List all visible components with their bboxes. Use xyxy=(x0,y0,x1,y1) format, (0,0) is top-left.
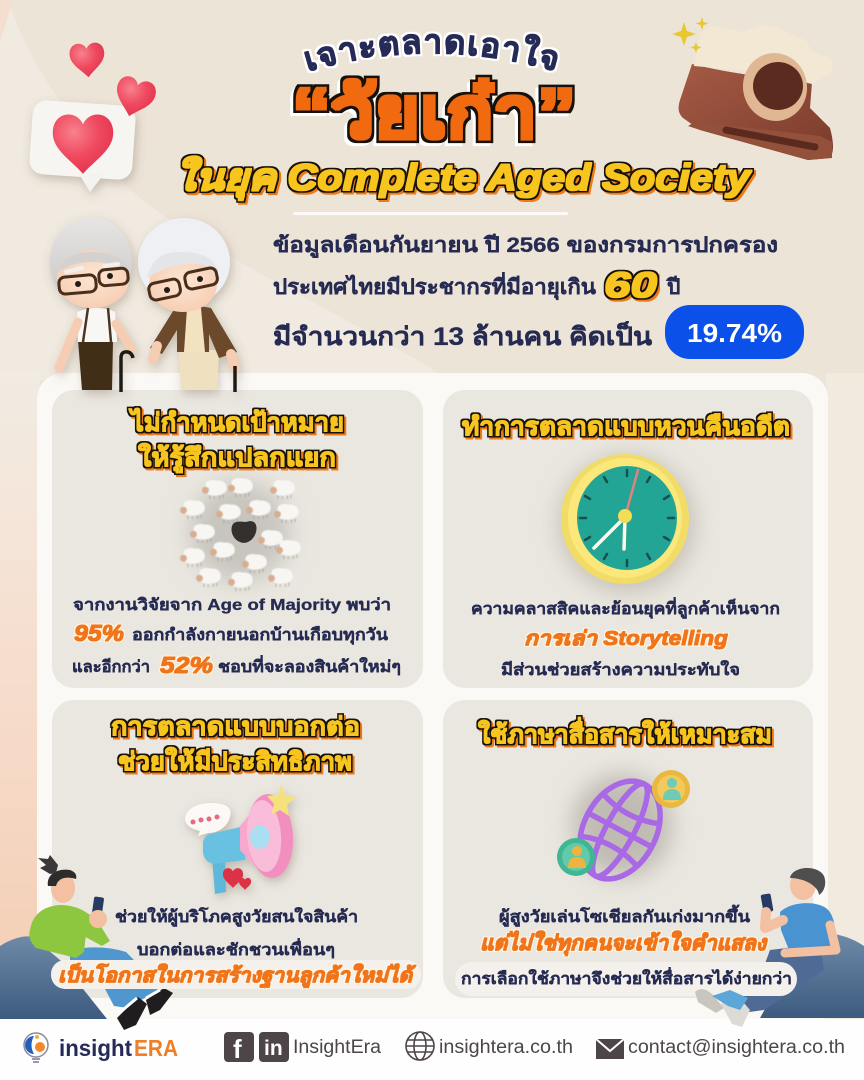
icon: flock with black sheep xyxy=(180,478,301,591)
card 1 text: และอีกกว่า xyxy=(72,657,150,676)
highlight pill: card 4: การเลือกใช้ภาษาจึงช่วยให้สื่อสารได้ง่ายกว่า xyxy=(461,967,792,988)
card 1 heading: ไม่กำหนดเป้าหมาย xyxy=(128,407,344,437)
card 1 heading xyxy=(128,407,344,474)
card 2 text: การเล่า Storytelling xyxy=(524,628,728,650)
man xyxy=(78,340,113,390)
intro text xyxy=(273,233,778,351)
card 2 text: มีส่วนช่วยสร้างความประทับใจ xyxy=(501,660,740,679)
social: linkedin xyxy=(259,1032,289,1062)
title line 2: “วัยเก๋า” xyxy=(292,74,576,152)
social: facebook xyxy=(224,1032,254,1064)
shoes of man xyxy=(695,989,750,1027)
card 3 text: บอกต่อและชักชวนเพื่อนๆ xyxy=(137,938,335,959)
card 2 heading: ทำการตลาดแบบหวนคืนอดีต xyxy=(462,413,790,441)
card 4 text: ผู้สูงวัยเล่นโซเชียลกันเก่งมากขึ้น xyxy=(499,904,750,928)
intro text: มีจำนวนกว่า 13 ล้านคน คิดเป็น xyxy=(273,321,652,351)
card 1 text: ชอบที่จะลองสินค้าใหม่ๆ xyxy=(218,655,401,676)
card 1 text xyxy=(72,596,401,678)
card 3 heading: ช่วยให้มีประสิทธิภาพ xyxy=(118,746,352,776)
card 1 text: ออกกำลังกายนอกบ้านเกือบทุกวัน xyxy=(132,626,388,645)
card 3 text xyxy=(115,906,358,959)
intro text: ประเทศไทยมีประชากรที่มีอายุเกิน xyxy=(273,271,597,301)
icon: website globe xyxy=(406,1032,434,1060)
illustration: elderly couple xyxy=(50,217,237,392)
logo: insightERA: insight xyxy=(59,1035,132,1061)
social: facebook: f xyxy=(233,1034,242,1064)
social: linkedin: in xyxy=(264,1037,283,1060)
card 2 text xyxy=(471,597,780,679)
card: language xyxy=(443,700,813,998)
icon: hearts and speech bubble xyxy=(29,42,159,192)
card: no target xyxy=(52,390,423,688)
logo mark xyxy=(24,1033,48,1062)
highlight pill: card 4 xyxy=(455,962,797,996)
logo: insightERA xyxy=(24,1033,178,1062)
woman xyxy=(179,350,219,390)
divider xyxy=(293,212,568,215)
intro text: ปี xyxy=(665,275,680,299)
card 1 heading: ให้รู้สึกแปลกแยก xyxy=(138,442,336,474)
card 1 text: 95% xyxy=(74,620,124,646)
highlight pill: card 3 xyxy=(51,960,421,989)
intro text: ข้อมูลเดือนกันยายน ปี 2566 ของกรมการปกครอง xyxy=(273,233,778,259)
card 1 text: จากงานวิจัยจาก Age of Majority พบว่า xyxy=(73,596,391,614)
icon: globe with people xyxy=(557,767,690,893)
main white panel xyxy=(37,373,828,1033)
highlighted number 60: 60 xyxy=(604,266,658,305)
social: handle: InsightEra xyxy=(293,1037,381,1058)
card 1 text: 52% xyxy=(160,652,213,678)
card 3 text: ช่วยให้ผู้บริโภคสูงวัยสนใจสินค้า xyxy=(115,906,358,928)
website: insightera.co.th xyxy=(439,1037,573,1058)
card 3 heading xyxy=(111,713,360,776)
icon: camera xyxy=(672,17,833,160)
stat pill: 19.74% xyxy=(687,318,782,348)
illustration: man on bean bag xyxy=(738,868,864,1018)
icon: clock xyxy=(559,454,695,592)
email: contact@insightera.co.th xyxy=(628,1037,845,1058)
card 4 heading: ใช้ภาษาสื่อสารให้เหมาะสม xyxy=(478,717,772,749)
card 4 text xyxy=(480,904,768,956)
footer band xyxy=(0,1019,864,1080)
title line 1: เจาะตลาดเอาใจ xyxy=(302,32,560,73)
card: nostalgia xyxy=(443,390,813,688)
highlight pill: card 3: เป็นโอกาสในการสร้างฐานลูกค้าใหม่ได้ xyxy=(58,963,417,989)
card 4 text: แต่ไม่ใช่ทุกคนจะเข้าใจคำแสลง xyxy=(480,930,768,956)
title line 3: ในยุค Complete Aged Society xyxy=(175,156,753,201)
card 2 text: ความคลาสสิคและย้อนยุคที่ลูกค้าเห็นจาก xyxy=(471,597,780,620)
stat pill xyxy=(665,305,804,359)
icon: megaphone xyxy=(185,784,296,894)
card: word of mouth xyxy=(52,700,423,998)
logo: insightERA: ERA xyxy=(134,1035,178,1061)
card 3 heading: การตลาดแบบบอกต่อ xyxy=(111,713,360,741)
icon: mail xyxy=(596,1039,624,1059)
illustration: woman on bean bag xyxy=(0,855,173,1030)
